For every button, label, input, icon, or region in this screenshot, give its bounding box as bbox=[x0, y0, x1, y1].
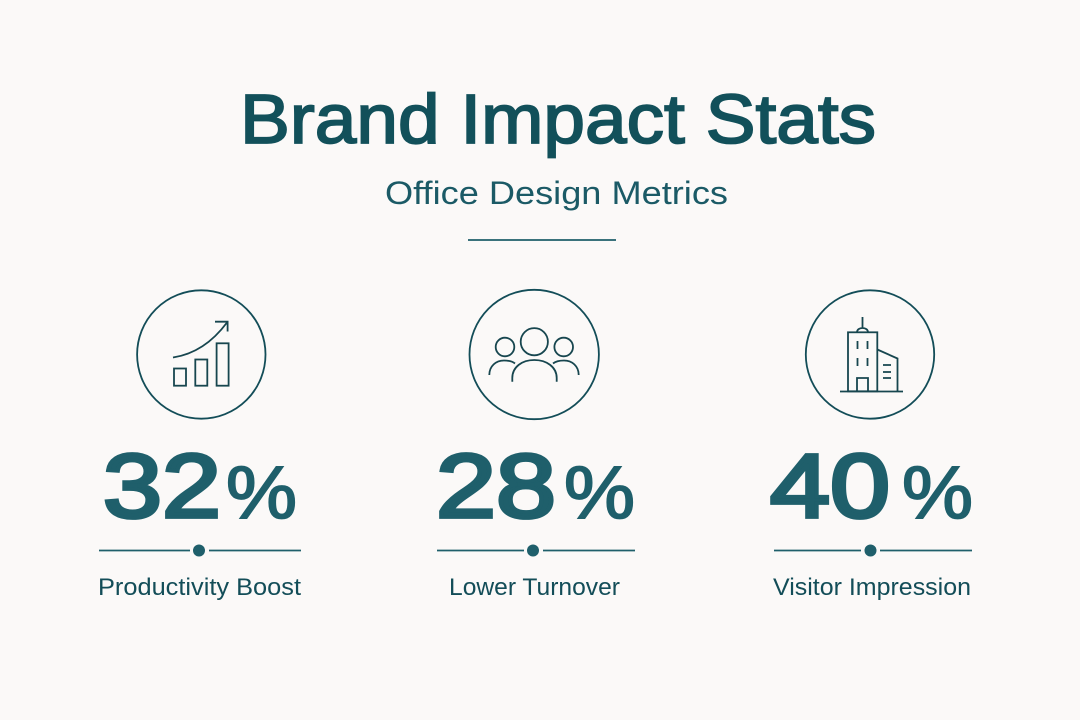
panel: productivity boost bbox=[98, 290, 301, 601]
stat: 32% bbox=[103, 437, 297, 537]
stat: 32%: % bbox=[226, 451, 297, 534]
stat: 28%: % bbox=[564, 451, 635, 534]
stat: 40%: 40 bbox=[770, 437, 890, 537]
stat: 40% bbox=[770, 437, 973, 537]
stat: 32%: 32 bbox=[103, 437, 221, 537]
label: Productivity Boost bbox=[98, 574, 301, 601]
stat: 28%: 28 bbox=[436, 437, 556, 537]
stat: 40%: % bbox=[902, 451, 973, 534]
divider with dot bbox=[774, 544, 972, 556]
stat: 28% bbox=[436, 437, 635, 537]
label: Lower Turnover bbox=[449, 574, 620, 601]
icon: office building bbox=[806, 290, 934, 419]
divider with dot bbox=[437, 544, 635, 556]
divider with dot bbox=[99, 544, 301, 556]
icon: group of people bbox=[470, 290, 599, 419]
subtitle: Office Design Metrics bbox=[385, 175, 728, 211]
icon: rising bar chart bbox=[137, 290, 266, 419]
title: Brand Impact Stats bbox=[240, 80, 876, 158]
panel: visitor impression bbox=[770, 290, 973, 601]
panel: lower turnover bbox=[436, 290, 635, 601]
label: Visitor Impression bbox=[773, 574, 971, 601]
